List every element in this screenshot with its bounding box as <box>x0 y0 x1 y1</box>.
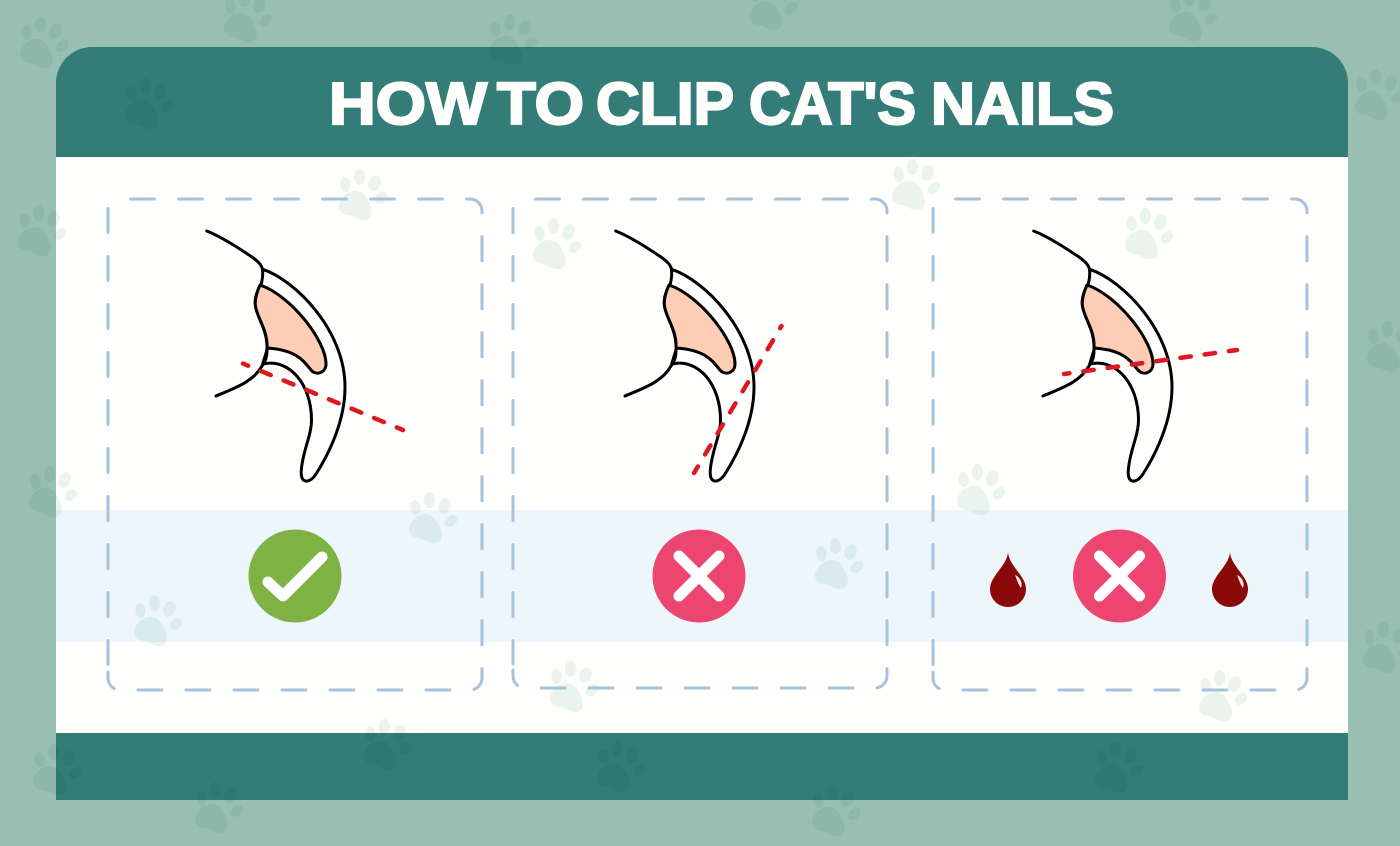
dashed panel border <box>933 199 1307 690</box>
cut line: below the quick, correct <box>243 364 403 430</box>
title: CAT'S <box>749 71 916 137</box>
title: CLIP <box>596 71 734 137</box>
pale blue status band <box>56 510 1348 642</box>
claw diagram <box>616 231 754 481</box>
icon: right blood drop <box>1212 552 1248 607</box>
icon: left blood drop <box>990 552 1026 607</box>
icon: red cross <box>652 530 746 622</box>
panel: cut into the quick <box>933 199 1307 690</box>
title: HOW <box>329 71 487 137</box>
title: TO <box>497 71 584 137</box>
title: NAILS <box>931 71 1114 137</box>
panel: correct cut <box>108 199 482 690</box>
cut line: through the quick <box>1064 350 1237 374</box>
claw diagram <box>1034 231 1172 481</box>
claw diagram <box>207 231 345 481</box>
title <box>329 71 1114 137</box>
white content panel <box>56 157 1348 733</box>
dashed panel border <box>513 199 887 688</box>
cut line: too near the tip <box>694 326 782 473</box>
footer bar <box>56 733 1348 800</box>
icon: red cross <box>1073 530 1166 622</box>
header bar <box>56 47 1348 157</box>
icon: green check <box>248 530 342 622</box>
dashed panel border <box>108 199 482 690</box>
panel: cut too short <box>513 199 887 688</box>
